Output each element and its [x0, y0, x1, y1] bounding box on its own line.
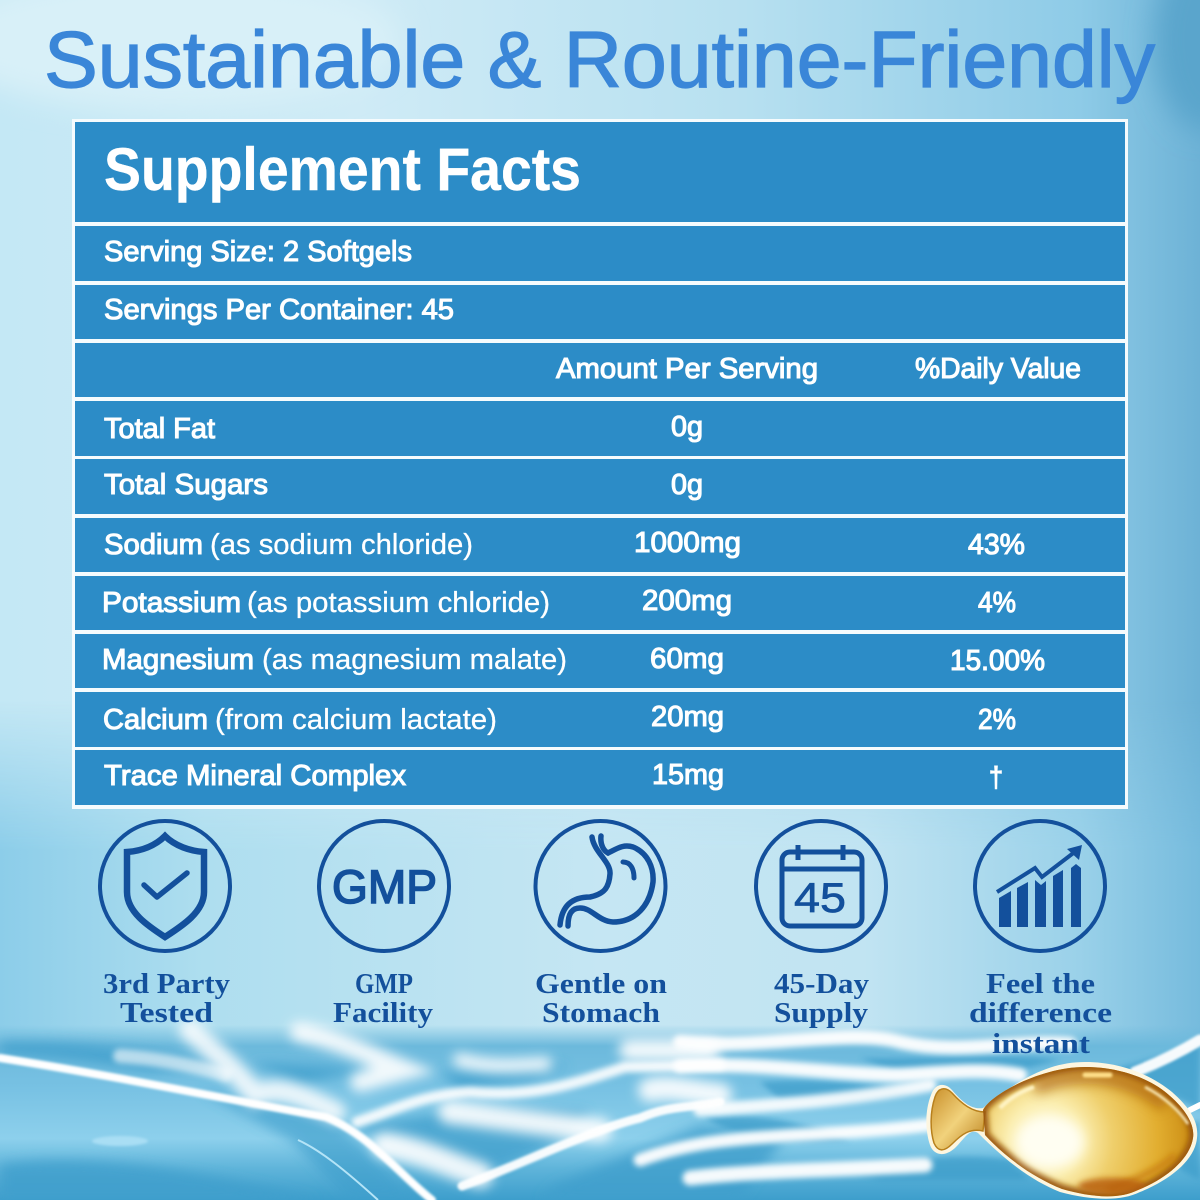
icon: rising bar chart with arrow	[975, 821, 1105, 951]
label: GMP facility: GMP	[355, 969, 413, 1000]
amounts per serving: 60mg	[650, 643, 724, 675]
label: GMP facility: Facility	[333, 998, 433, 1029]
serving info: Servings Per Container: 45	[104, 294, 454, 326]
label: feel the difference instant	[969, 969, 1112, 1060]
amounts per serving: 15mg	[652, 759, 724, 791]
nutrient names: Calcium	[103, 704, 208, 736]
nutrient names: Total Sugars	[104, 469, 268, 501]
nutrient names: Sodium	[104, 529, 203, 561]
heading: supplement facts: Supplement Facts	[104, 136, 581, 203]
label: 45-day supply: 45-Day	[774, 969, 869, 1000]
serving info: Serving Size: 2 Softgels	[104, 236, 412, 268]
label: gentle on stomach	[535, 969, 667, 1029]
icon: calendar, 45-day supply: 45	[794, 874, 846, 921]
column headers: Amount Per Serving	[556, 353, 818, 385]
nutrient names: Total Fat	[104, 413, 215, 445]
amounts per serving: 0g	[671, 469, 703, 501]
label: GMP facility	[333, 969, 433, 1029]
nutrient names: (from calcium lactate)	[215, 704, 497, 736]
daily values: 15.00%	[950, 645, 1045, 677]
nutrient names: Potassium	[102, 587, 241, 619]
label: 45-day supply: Supply	[774, 998, 868, 1029]
nutrient names: Trace Mineral Complex	[104, 760, 406, 792]
amounts per serving: 0g	[671, 411, 703, 443]
column headers: %Daily Value	[915, 353, 1081, 385]
column headers	[556, 353, 1081, 385]
nutrient names	[102, 413, 567, 792]
icon: stomach, gentle on stomach	[536, 821, 666, 951]
label: gentle on stomach: Stomach	[542, 998, 660, 1029]
amounts per serving: 200mg	[642, 585, 732, 617]
daily values: 2%	[978, 704, 1016, 736]
label: feel the difference instant: Feel the	[986, 969, 1095, 1000]
label: gentle on stomach: Gentle on	[535, 969, 667, 1000]
softgel: fish-shaped golden capsule	[926, 1062, 1197, 1199]
nutrient names: Magnesium	[102, 644, 254, 676]
label: 3rd party tested	[103, 969, 230, 1029]
amounts per serving: 1000mg	[634, 527, 741, 559]
serving info	[104, 236, 454, 326]
table rows	[75, 122, 1125, 805]
panel: supplement facts table	[72, 119, 1128, 809]
daily values: 43%	[968, 529, 1025, 561]
daily values: †	[989, 762, 1003, 794]
amounts per serving: 20mg	[651, 701, 724, 733]
daily values	[950, 529, 1045, 794]
water waves at the bottom	[0, 1025, 1200, 1200]
nutrient names: (as sodium chloride)	[210, 529, 473, 561]
label: feel the difference instant: instant	[992, 1029, 1091, 1060]
label: feel the difference instant: difference	[969, 998, 1112, 1029]
icon: GMP badge: GMP	[332, 860, 437, 913]
nutrient names: (as potassium chloride)	[247, 587, 550, 619]
icon: calendar, 45-day supply	[756, 821, 886, 951]
label: 45-day supply	[774, 969, 869, 1029]
label: 3rd party tested: Tested	[120, 998, 214, 1029]
label: 3rd party tested: 3rd Party	[103, 969, 230, 1000]
daily values: 4%	[978, 587, 1016, 619]
softgel rim and highlights	[983, 1067, 1193, 1196]
icon: GMP badge	[319, 821, 449, 951]
icon: shield with check, 3rd party tested	[100, 821, 230, 951]
title: Sustainable & Routine-Friendly	[44, 15, 1155, 104]
amounts per serving	[634, 411, 741, 791]
nutrient names: (as magnesium malate)	[262, 644, 567, 676]
